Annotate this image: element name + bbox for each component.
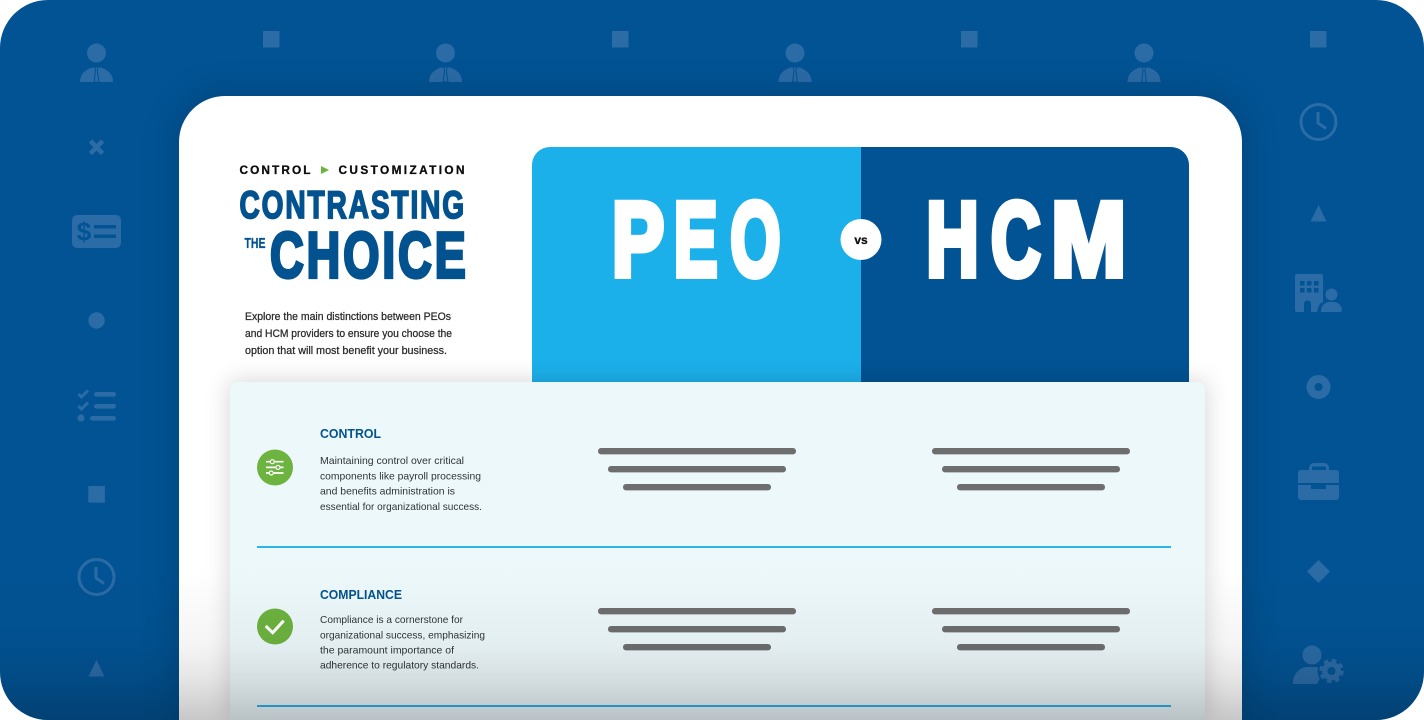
icon: sliders	[257, 450, 293, 486]
icon: square top 5	[961, 31, 978, 48]
icon: clock left	[79, 560, 114, 594]
text: control description: Maintaining control over critical	[320, 456, 464, 467]
heading: compliance: COMPLIANCE	[320, 588, 402, 602]
text: compliance description	[320, 615, 485, 672]
panel: HCM header: H	[926, 182, 979, 298]
text: compliance description: adherence to regulatory standards.	[320, 660, 479, 672]
panel: HCM header	[861, 147, 1189, 384]
icon: check	[257, 608, 293, 644]
title: THE	[244, 236, 266, 252]
icon: clock right	[1301, 104, 1336, 140]
title: CONTRASTING	[240, 184, 464, 227]
HCM placeholder lines	[932, 448, 1130, 490]
icon: circle	[88, 312, 105, 329]
panel: PEO header: O	[730, 182, 780, 298]
vs badge: vs	[854, 233, 868, 247]
heading: control: CONTROL	[320, 427, 381, 441]
icon: checklist	[77, 390, 116, 422]
text: control description	[320, 456, 482, 513]
icon: dollar bill: $	[77, 216, 92, 246]
panel: PEO header: P	[612, 182, 664, 298]
icon: building with person	[1295, 274, 1342, 312]
panel: PEO header: E	[674, 182, 718, 298]
icon: person top 6	[1128, 44, 1160, 82]
kicker: CUSTOMIZATION	[338, 163, 464, 177]
icon: triangle left	[88, 660, 104, 676]
panel: white card	[179, 96, 1242, 720]
row: control	[257, 427, 1130, 513]
title: CHOICE	[270, 220, 466, 292]
card shadow	[175, 92, 1246, 720]
panel: PEO header	[532, 147, 861, 384]
icon: x mark	[90, 141, 102, 154]
kicker	[240, 165, 464, 174]
PEO placeholder lines	[598, 448, 796, 490]
text: control description: essential for organizational success.	[320, 502, 482, 513]
icon: dollar bill	[72, 215, 121, 248]
panel shadow	[228, 380, 1207, 720]
icon: triangle right	[1310, 205, 1326, 222]
icon: ring	[1310, 379, 1326, 395]
row: compliance	[257, 588, 1130, 672]
panel: HCM header: M	[1051, 182, 1126, 298]
text: compliance description: the paramount importance of	[320, 646, 454, 656]
icon: square top 7	[1310, 31, 1326, 48]
icon: person with gear	[1293, 646, 1346, 685]
title	[240, 190, 466, 280]
text: compliance description: Compliance is a cornerstone for	[320, 615, 464, 626]
panel: HCM header: C	[991, 182, 1040, 298]
HCM placeholder lines	[932, 608, 1130, 650]
vs badge	[840, 219, 882, 260]
icon: square left	[88, 486, 105, 503]
intro paragraph: option that will most benefit your business.	[245, 345, 447, 357]
text: compliance description: organizational success, emphasizing	[320, 630, 485, 642]
intro paragraph: Explore the main distinctions between PEOs	[245, 311, 451, 323]
icon: person top 2	[429, 44, 462, 82]
intro paragraph	[245, 311, 452, 357]
icon: diamond	[1307, 560, 1330, 583]
panel: comparison table	[230, 382, 1205, 720]
icon: person top 4	[778, 44, 812, 82]
intro paragraph: and HCM providers to ensure you choose the	[245, 328, 452, 340]
text: control description: and benefits administration is	[320, 486, 455, 498]
icon: square top 1	[263, 31, 280, 48]
icon: square top 3	[612, 31, 628, 48]
kicker: CONTROL	[240, 163, 310, 177]
icon: person left	[80, 44, 113, 82]
icon: briefcase	[1298, 463, 1339, 500]
text: control description: components like payroll processing	[320, 472, 481, 482]
PEO placeholder lines	[598, 608, 796, 650]
